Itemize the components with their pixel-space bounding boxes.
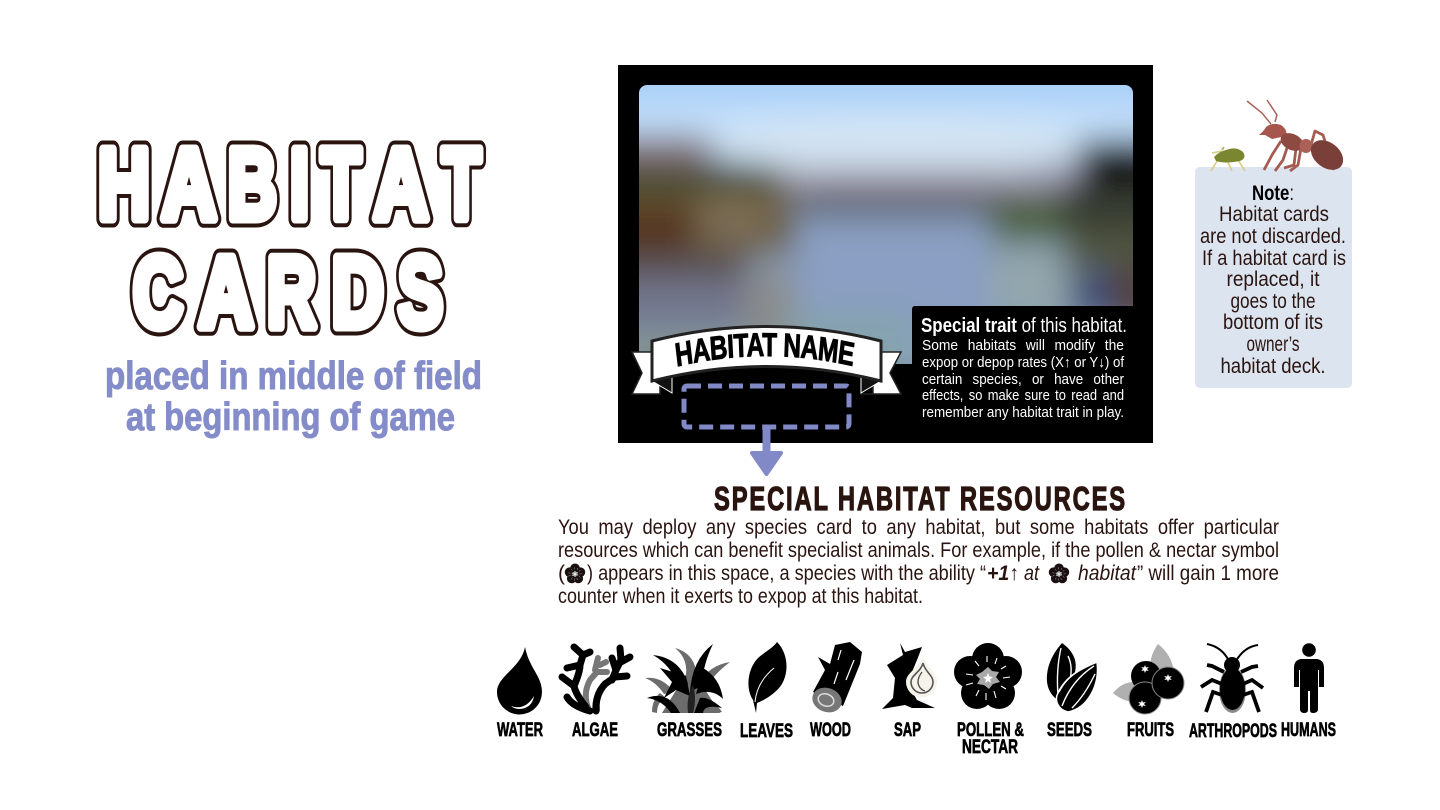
paragraph: resources explanation: at <box>1024 562 1040 585</box>
paragraph: resources explanation: ” will gain 1 more <box>1137 562 1279 585</box>
title: Habitat Cards: S <box>398 236 443 348</box>
icon: aphid <box>1211 147 1245 171</box>
banner: habitat name <box>631 325 902 395</box>
icon: algae <box>562 647 630 711</box>
labels: resources: ARTHROPODS <box>1189 721 1277 742</box>
blurred habitat photo <box>639 85 1133 364</box>
title: Habitat Cards: R <box>267 236 316 348</box>
title: Habitat Cards: R <box>267 236 316 348</box>
special trait text box: effects, so make sure to read and <box>922 388 1124 404</box>
card frame <box>618 65 1153 443</box>
title: Habitat Cards: I <box>290 128 309 240</box>
icon: inline flower <box>1049 564 1069 583</box>
dashed resource slot <box>684 386 849 427</box>
subtitle: placed in middle of field <box>105 355 482 398</box>
icon: water <box>497 647 542 714</box>
title: Habitat Cards: T <box>321 128 361 240</box>
title: Habitat Cards: A <box>162 128 216 240</box>
title: Habitat Cards <box>98 128 481 348</box>
title: Habitat Cards: I <box>290 128 309 240</box>
labels: resources: WOOD <box>810 720 851 741</box>
note text: replaced, it <box>1226 268 1320 291</box>
title: Habitat Cards: A <box>162 128 216 240</box>
title: Habitat Cards: D <box>332 236 384 348</box>
special trait text box: remember any habitat trait in play. <box>922 405 1124 421</box>
icon: inline flower <box>565 564 585 583</box>
note text: bottom of its <box>1223 311 1323 334</box>
subtitle: at beginning of game <box>126 396 455 439</box>
icon: seeds <box>1047 643 1097 712</box>
labels: resources: NECTAR <box>962 737 1018 758</box>
title: Habitat Cards: A <box>374 128 428 240</box>
note panel <box>1195 167 1352 388</box>
subtitle <box>105 355 482 439</box>
paragraph: resources explanation: habitat <box>1078 562 1137 585</box>
note text: Habitat cards <box>1219 203 1329 226</box>
labels: resources: GRASSES <box>657 720 722 741</box>
icon row: resources <box>497 642 1324 716</box>
note text: are not discarded. <box>1200 225 1346 248</box>
title: Habitat Cards: A <box>198 236 254 348</box>
icon: ant <box>1247 100 1349 176</box>
icon: pollen & nectar <box>954 643 1022 709</box>
labels: resources: SEEDS <box>1047 720 1092 741</box>
paragraph: resources explanation: ) appears in this space, a species with the ability “ <box>587 562 986 585</box>
banner: habitat name: HABITAT NAME <box>675 332 855 367</box>
heading: special habitat resources: SPECIAL HABITAT RESOURCES <box>714 481 1125 518</box>
labels: resources: HUMANS <box>1281 720 1336 741</box>
note text: habitat deck. <box>1220 355 1326 378</box>
arrow down to resources <box>752 428 781 474</box>
title: Habitat Cards: A <box>198 236 254 348</box>
title: Habitat Cards: C <box>133 236 183 348</box>
labels: resources: FRUITS <box>1127 720 1174 741</box>
note text: If a habitat card is <box>1202 247 1346 270</box>
title: Habitat Cards: B <box>228 128 277 240</box>
icon: wood <box>809 642 862 716</box>
icon: grasses <box>645 644 730 713</box>
paragraph: resources explanation: +1↑ <box>987 562 1019 585</box>
paragraph: resources explanation: counter when it exerts to expop at this habitat. <box>558 585 923 608</box>
labels: resources: WATER <box>497 720 543 741</box>
title: Habitat Cards: B <box>228 128 277 240</box>
icon: arthropods <box>1201 644 1263 713</box>
labels: resources: POLLEN & <box>957 720 1024 741</box>
paragraph: resources explanation: ( <box>558 562 565 585</box>
title: Habitat Cards: C <box>133 236 183 348</box>
special trait text box: certain species, or have other <box>922 372 1124 388</box>
icon: leaves <box>748 642 787 713</box>
special trait text box <box>912 306 1133 443</box>
special trait text box: Special trait of this habitat. <box>921 315 1127 337</box>
labels: resources <box>497 720 1336 758</box>
paragraph: resources explanation: You may deploy any species card to any habitat, but some habitats offer particular <box>558 516 1279 539</box>
title: Habitat Cards: H <box>98 128 150 240</box>
labels: resources: ALGAE <box>572 720 618 741</box>
special trait text box: expop or depop rates (X↑ or Y↓) of <box>922 355 1125 371</box>
note text <box>1200 182 1346 378</box>
title: Habitat Cards: T <box>321 128 361 240</box>
labels: resources: SAP <box>894 720 921 741</box>
title: Habitat Cards: T <box>442 128 481 240</box>
labels: resources: LEAVES <box>740 721 793 742</box>
title: Habitat Cards: S <box>398 236 443 348</box>
note text: owner’s <box>1246 333 1300 356</box>
title: Habitat Cards: D <box>332 236 384 348</box>
title: Habitat Cards: T <box>442 128 481 240</box>
icon: fruits <box>1113 644 1184 714</box>
note text: Note: <box>1252 182 1294 205</box>
panel: habitat card <box>618 65 1153 443</box>
title: Habitat Cards: A <box>374 128 428 240</box>
title: Habitat Cards: H <box>98 128 150 240</box>
note text: goes to the <box>1230 290 1316 313</box>
icon: sap <box>882 643 937 709</box>
special trait text box: Some habitats will modify the <box>922 338 1124 354</box>
paragraph: resources explanation: resources which can benefit specialist animals. For example, if the pollen & nectar symbol <box>558 539 1279 562</box>
paragraph: resources explanation <box>558 516 1279 608</box>
icon: humans <box>1294 643 1324 713</box>
